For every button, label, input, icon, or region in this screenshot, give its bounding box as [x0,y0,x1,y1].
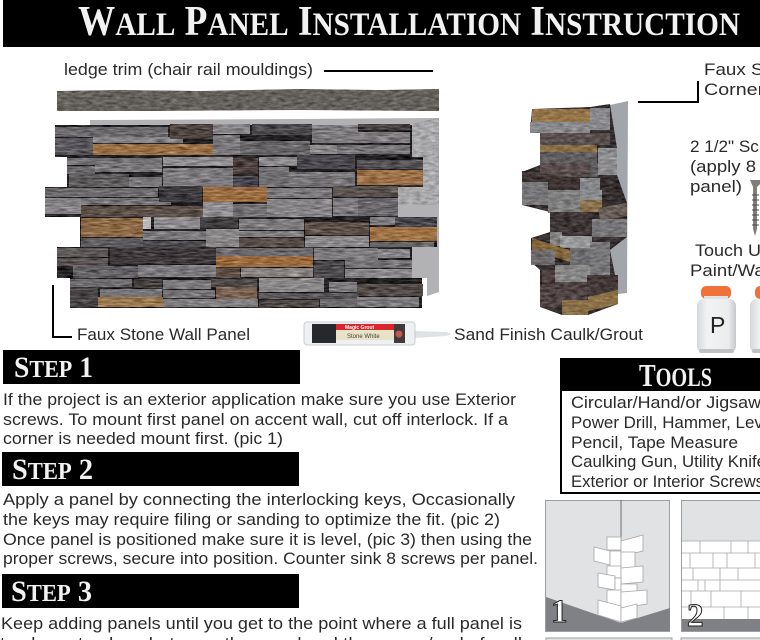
heading: step 3 [2,574,299,608]
label: screws: panel) [690,177,742,196]
illustration: pic 2 wall: 2 [687,598,704,634]
text: step 1 body: If the project is an exterior application make sure you use Exterior [3,390,516,409]
text: step 2 body: proper screws, secure into position. Counter sink 8 screws per panel. [3,549,538,568]
heading: step 2 [2,452,299,486]
heading: step 1 [3,350,300,384]
label: screws [690,137,760,196]
heading: step 2: STEP 2 [12,453,93,486]
text: step 1 body: screws. To mount first panel on accent wall, cut off interlock. If a [3,410,509,429]
row 1 stones [55,124,410,155]
text: step 3 body [0,614,522,640]
heading: step 3: STEP 3 [11,575,92,608]
text: step 2 body: Apply a panel by connecting the interlocking keys, Occasionally [3,490,516,509]
image: ledge trim stone [57,89,439,111]
text: step 1 body [3,390,516,448]
image: caulk tube: Stone White [347,334,380,340]
image: caulk tube [304,322,452,345]
row 3 stones [45,186,398,217]
text: step 2 body: the keys may require filing or sanding to optimize the fit. (pic 2) [3,510,500,529]
row 2 stones [67,155,423,187]
text: step 3 body: Keep adding panels until you get to the point where a full panel is [1,614,522,633]
title banner: WALL PANEL INSTALLATION INSTRUCTION [78,0,740,45]
label: caulk grout: Sand Finish Caulk/Grout [454,325,643,344]
label: faux stone wall panel [53,285,250,344]
row 5 stones [57,247,412,278]
illustration: pic 2 wall [682,500,760,634]
panel: tools [560,357,760,493]
illustration: pic 4 top edge [681,638,760,640]
tools list: Circular/Hand/or Jigsaw [571,393,760,412]
label: faux stone wall panel: Faux Stone Wall Panel [77,325,250,344]
text: step 2 body: Once panel is positioned make sure it is level, (pic 3) then using the [3,530,532,549]
image: faux stone wall panel [45,118,439,308]
icon: screw [750,180,760,236]
illustration: pic 3 top edge [546,638,672,640]
label: faux stone corners [704,60,760,99]
text: step 2 body [3,490,538,568]
illustration: pic 1 corner [546,500,670,632]
row 4 stones [81,217,437,247]
image: caulk tube: Magic Grout [345,325,375,331]
heading: tools: TOOLS [639,357,712,393]
label: ledge trim: ledge trim (chair rail mouldings) [64,60,313,79]
image: faux stone corner [522,101,628,315]
heading: step 1: STEP 1 [14,351,93,384]
icon: paint bottle P [697,286,736,353]
row 6 stones [70,278,423,307]
connector line to corners [638,81,698,102]
icon: paint bottle W [750,286,760,353]
text: step 1 body: corner is needed mount first. (pic 1) [3,429,283,448]
tools list: Pencil, Tape Measure [571,433,738,452]
icon: paint bottle P: P [710,312,725,338]
tools list [571,393,760,491]
illustration: pic 1 corner: 1 [551,594,568,630]
label: touch up paint [690,241,760,280]
